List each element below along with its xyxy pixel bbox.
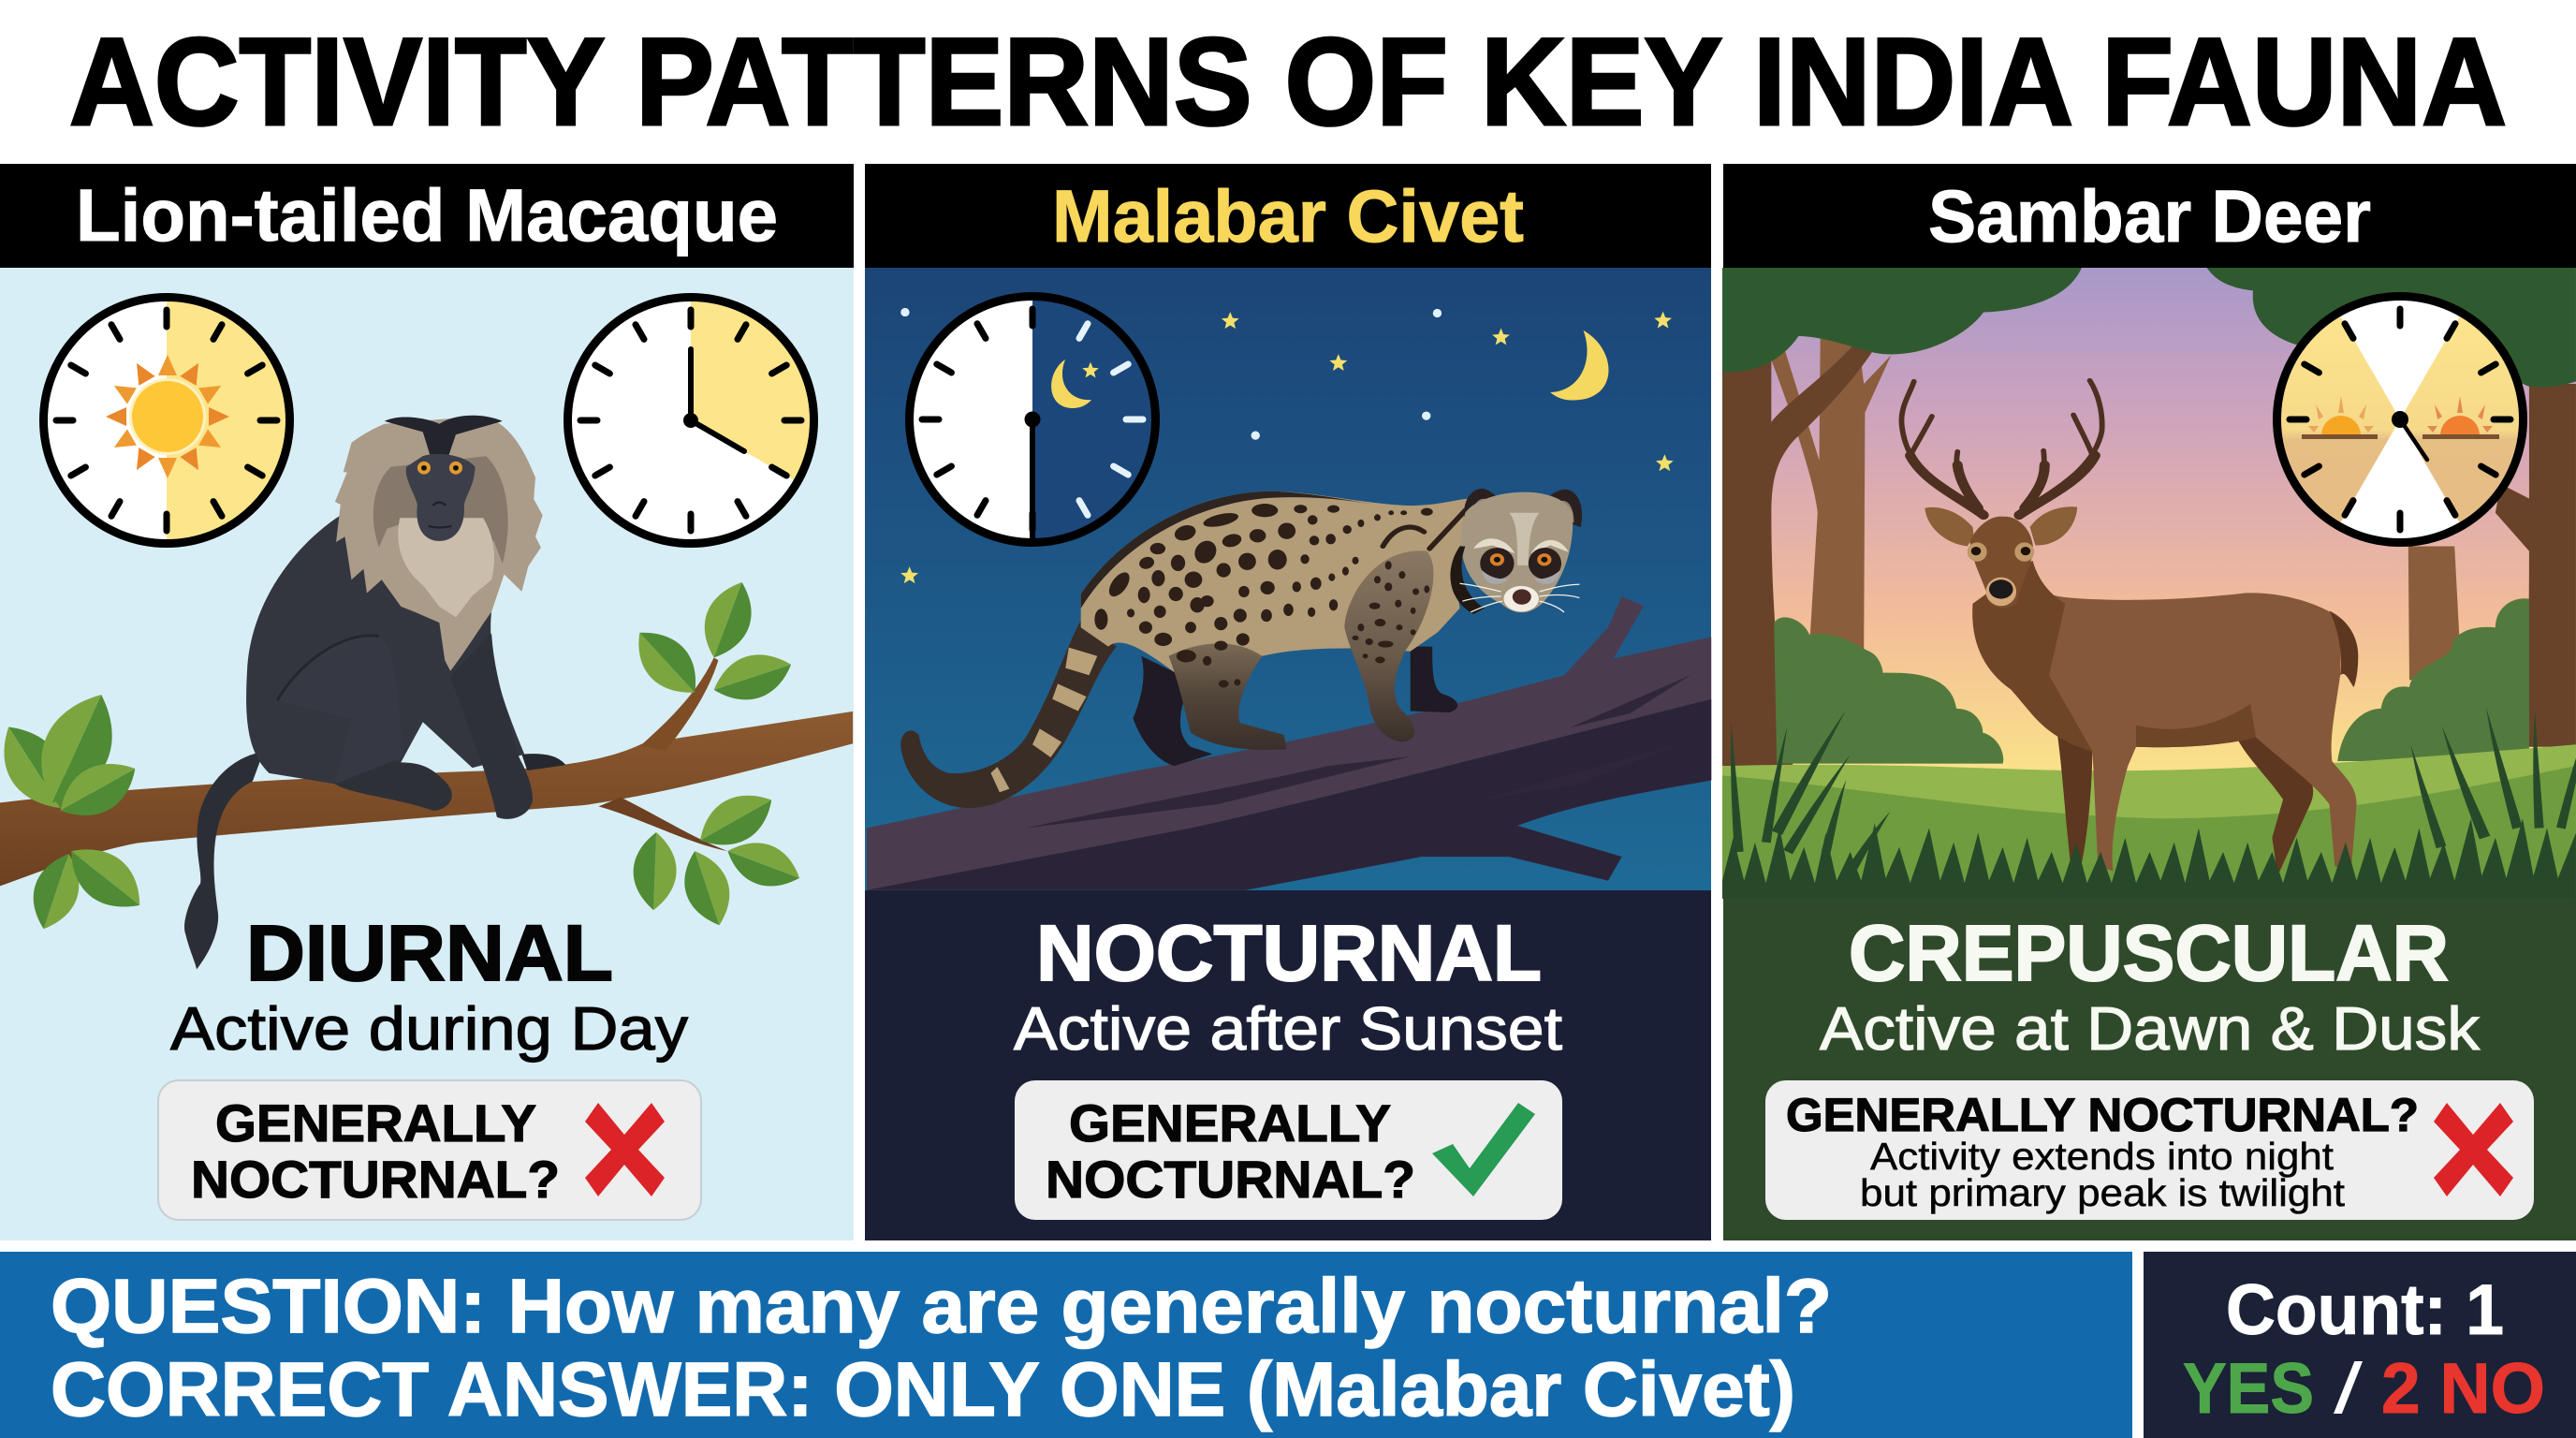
grass [1722,706,2576,899]
header: macaque [0,164,854,268]
deer [1901,380,2358,876]
count box: Count: 1 [2226,1270,2504,1350]
answer bar [0,1252,2132,1438]
header: deer: Sambar Deer [1928,174,2371,257]
answer bar: QUESTION: How many are generally nocturnal? [51,1264,1832,1349]
callout: nocturnal yes [1015,1080,1562,1220]
icon: dawn and dusk clock [2276,296,2524,543]
callout: not nocturnal: GENERALLY [215,1093,536,1152]
icon: red cross [2434,1103,2513,1196]
text: diurnal label: DIURNAL [246,909,613,997]
text: diurnal label: Active during Day [170,994,689,1063]
icon: clock showing four hours [567,298,814,543]
civet head [1450,489,1582,614]
count box: 2 NO [2381,1349,2545,1429]
text: nocturnal label: NOCTURNAL [1036,909,1542,997]
text: crepuscular label: Active at Dawn & Dusk [1820,994,2481,1063]
title: ACTIVITY PATTERNS OF KEY INDIA FAUNA [69,13,2507,152]
header: civet: Malabar Civet [1052,174,1524,257]
icon: night clock with moon [910,296,1155,543]
text: crepuscular label [1820,909,2481,1063]
callout: not nocturnal [158,1080,701,1220]
illustration: forest, deer and grass [1722,268,2576,899]
text: crepuscular label: CREPUSCULAR [1849,909,2449,997]
callout: not nocturnal with note [1765,1080,2534,1220]
callout: not nocturnal with note: Activity extends into night [1870,1135,2334,1178]
icon: daytime clock with sun [43,298,290,543]
count box [2144,1252,2576,1438]
count box: / [2334,1349,2364,1429]
header: deer [1723,164,2576,268]
callout: nocturnal yes: NOCTURNAL? [1046,1150,1415,1209]
panel: sambar deer [1722,164,2576,1240]
count box: YES [2183,1349,2314,1429]
civet spots [1094,504,1433,687]
illustration: macaque on a branch [0,416,853,969]
illustration: night sky, civet and log [867,308,1711,890]
stars and moon [900,308,1674,583]
icon: green check [1432,1103,1535,1196]
panel: lion-tailed macaque [0,164,854,1240]
panel: malabar civet [865,164,1711,1240]
answer bar: CORRECT ANSWER: ONLY ONE (Malabar Civet) [51,1347,1795,1432]
icon: red cross [585,1103,665,1196]
text: nocturnal label: Active after Sunset [1014,994,1562,1063]
header: civet [865,164,1711,268]
callout: not nocturnal with note: but primary peak is twilight [1860,1171,2346,1214]
callout: nocturnal yes: GENERALLY [1069,1093,1391,1152]
callout: not nocturnal with note: GENERALLY NOCTURNAL? [1786,1089,2419,1141]
text: diurnal label [170,909,689,1063]
header: macaque: Lion-tailed Macaque [76,173,778,257]
text: nocturnal label [1014,909,1562,1063]
callout: not nocturnal: NOCTURNAL? [191,1150,560,1209]
